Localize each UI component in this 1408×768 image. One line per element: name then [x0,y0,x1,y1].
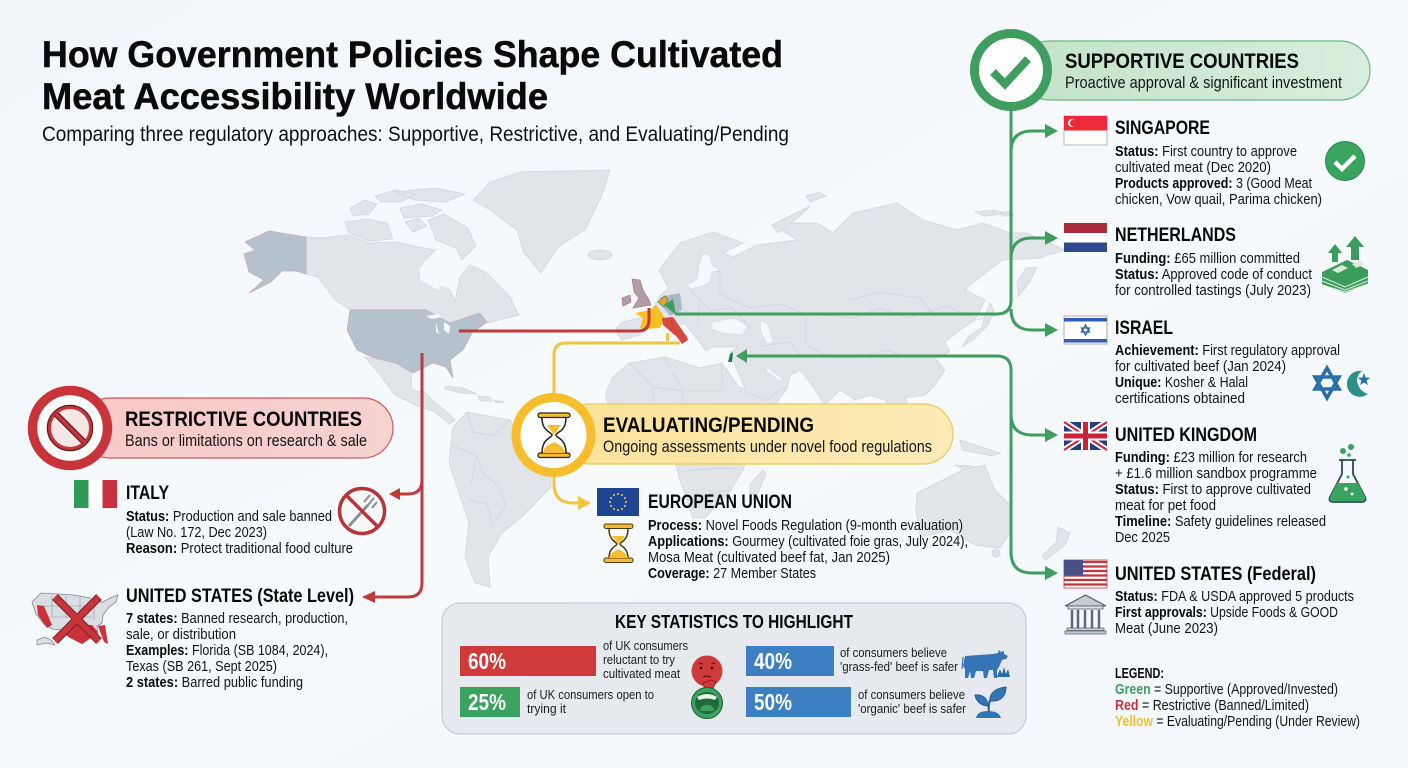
flag: Italy [74,480,117,508]
stat: 40 percent [746,645,959,676]
panel: supportive header: SUPPORTIVE COUNTRIES [1065,49,1299,73]
panel: European Union: Process: Novel Foods Regulation (9-month evaluation) [648,518,963,534]
panel: Israel: for cultivated beef (Jan 2024) [1115,359,1286,375]
panel: restrictive header: Bans or limitations on research & sale [125,432,367,450]
flag: Netherlands [1064,223,1107,252]
title [42,33,783,117]
map: New Zealand [1042,527,1070,560]
connector: restrictive arrows [362,308,649,603]
panel: Singapore [1064,116,1364,208]
stat: 25 percent: 25% [468,689,506,715]
icon: hourglass in ring [516,398,591,472]
panel: United States state level: 7 states: Banned research, production, [126,611,348,627]
title: Meat Accessibility Worldwide [42,75,548,117]
stat: 40 percent: of consumers believe [840,645,947,660]
panel: European Union: Coverage: 27 Member States [648,566,816,582]
map: Hudson Bay [420,252,458,290]
title: How Government Policies Shape Cultivated [42,33,783,75]
flag: United Kingdom [1064,422,1107,450]
panel: Italy: Status: Production and sale banned [126,509,332,525]
map: Israel highlighted [728,352,733,362]
panel: Singapore: SINGAPORE [1115,117,1210,139]
panel: United States state level: 2 states: Barred public funding [126,675,303,691]
map: Germany highlighted [660,293,682,316]
stat: 60 percent [460,638,688,681]
panel: United States state level: UNITED STATES (State Level) [126,585,354,607]
panel: United Kingdom: meat for pet food [1115,498,1216,514]
map: Canada [306,235,519,330]
panel: Israel [1064,316,1370,407]
panel: United Kingdom: Status: First to approve cultivated [1115,482,1311,498]
panel: United States state level: sale, or distribution [126,627,236,643]
icon: open mouth face [692,688,722,718]
map: Novaya Zemlya and northern islands [772,192,1014,233]
panel: Singapore: cultivated meat (Dec 2020) [1115,160,1271,176]
panel: United States state level [32,585,354,691]
stat: 25 percent: trying it [527,701,566,716]
map: Tasmania [992,549,1000,557]
panel: Israel: Achievement: First regulatory approval [1115,343,1340,359]
flag: Israel [1064,316,1107,344]
map: Kamchatka [1017,267,1037,297]
panel: Israel: Unique: Kosher & Halal [1115,375,1248,391]
icon: flask [1330,444,1366,502]
map: Eurasia [615,203,1065,420]
panel: restrictive header: RESTRICTIVE COUNTRIES [125,407,362,431]
map: Southeast Asian islands [955,440,1000,472]
map: Mexico and Central America [365,357,455,424]
panel: United States federal: Status: FDA & USDA approved 5 products [1115,589,1354,605]
panel: Netherlands: Status: Approved code of conduct [1115,267,1312,283]
panel: Netherlands [1064,223,1368,299]
heading: key statistics: KEY STATISTICS TO HIGHLIGHT [615,611,854,632]
panel: Singapore: Status: First country to approve [1115,144,1297,160]
icon: thinking face [692,656,722,689]
icon: supportive check [974,34,1048,106]
subtitle: Comparing three regulatory approaches: Supportive, Restrictive, and Evaluating/Pending [42,123,789,146]
panel: supportive header: Proactive approval & significant investment [1065,74,1342,92]
panel: Italy: ITALY [126,482,169,504]
map: Africa [606,357,788,518]
panel: supportive header [974,34,1370,106]
panel: evaluating header [516,398,953,472]
stat: 25 percent [460,687,654,717]
stat: 40 percent: 'grass-fed' beef is safer [840,659,959,674]
panel: key statistics [442,603,1026,734]
panel: United States state level: Examples: Florida (SB 1084, 2024), [126,643,328,659]
icon: star of David and crescent [1315,368,1370,398]
stat: 60 percent: 60% [468,648,506,674]
panel: United Kingdom: Dec 2025 [1115,530,1170,546]
stat: 60 percent: cultivated meat [603,666,680,681]
stat: 50 percent: of consumers believe [858,687,965,702]
panel: Netherlands: NETHERLANDS [1115,224,1236,246]
icon: government building [1065,595,1106,634]
map: France highlighted [635,305,665,329]
stat: 60 percent: of UK consumers [603,638,688,653]
map: Iceland [588,250,612,260]
panel: United States federal: First approvals: Upside Foods & GOOD [1115,605,1338,621]
panel: United States state level: Texas (SB 261, Sept 2025) [126,659,277,675]
map: Great Lakes [426,314,450,334]
panel: United States federal [1064,560,1354,637]
panel: Singapore: chicken, Vow quail, Parima chicken) [1115,192,1322,208]
map: Arctic islands [345,188,476,260]
panel: evaluating header: Ongoing assessments under novel food regulations [603,438,932,456]
panel: European Union: Applications: Gourmey (cultivated foie gras, July 2024), [648,534,968,550]
map: Baltic, Black and Caspian seas, Persian Gulf [687,253,783,381]
map: United States highlighted [244,231,487,378]
map: Madagascar [750,470,766,495]
icon: US map with red X [32,593,118,645]
panel: United Kingdom: Funding: £23 million for research [1115,450,1307,466]
map: Sardinia [666,333,669,341]
legend: LEGEND: [1115,666,1164,682]
stat: 50 percent: 'organic' beef is safer [858,701,967,716]
panel: restrictive header [32,390,393,466]
panel: European Union: Mosa Meat (cultivated beef fat, Jan 2025) [648,550,890,566]
panel: evaluating header: EVALUATING/PENDING [603,413,814,437]
stat: 60 percent: reluctant to try [603,652,675,667]
map: Greenland [473,170,610,273]
map: Netherlands highlighted [658,296,668,307]
stat: 50 percent [746,687,967,717]
flag: Singapore [1064,116,1107,145]
icon: approved check [1326,142,1364,180]
map: Australia [916,465,1012,548]
flag: European Union [597,488,639,516]
panel: Italy: Reason: Protect traditional food culture [126,541,353,557]
stat: 40 percent: 40% [754,648,792,674]
map: Caribbean [445,386,504,403]
icon: no fork [340,488,384,534]
icon: prohibition sign [32,390,108,466]
legend: Green = Supportive (Approved/Invested) [1115,682,1338,698]
legend: Red = Restrictive (Banned/Limited) [1115,698,1309,714]
panel: Singapore: Products approved: 3 (Good Meat [1115,176,1312,192]
stat: 50 percent: 50% [754,689,792,715]
panel: United Kingdom: + £1.6 million sandbox programme [1115,466,1317,482]
panel: United Kingdom: Timeline: Safety guidelines released [1115,514,1326,530]
panel: United Kingdom [1064,422,1366,546]
panel: European Union [597,488,968,582]
map: Japan [962,303,994,347]
map: United Kingdom and Ireland highlighted [622,279,651,308]
panel: United Kingdom: UNITED KINGDOM [1115,424,1257,446]
legend: Yellow = Evaluating/Pending (Under Review) [1115,714,1360,730]
legend [1115,666,1360,730]
map: Italy highlighted [662,317,688,344]
world map [244,170,1070,587]
icon: money with arrows [1322,236,1368,293]
panel: European Union: EUROPEAN UNION [648,491,792,513]
panel: Netherlands: for controlled tastings (July 2023) [1115,283,1311,299]
map: South America [449,412,551,587]
panel: Netherlands: Funding: £65 million committed [1115,251,1300,267]
panel: Italy [74,480,384,557]
icon: small hourglass [604,524,633,562]
icon: plant [975,687,1006,718]
connector: supportive arrows [664,105,1058,580]
connector: evaluating arrows [554,343,680,510]
panel: Italy: (Law No. 172, Dec 2023) [126,525,267,541]
panel: Israel: ISRAEL [1115,317,1173,339]
icon: cow [962,650,1010,678]
panel: United States federal: UNITED STATES (Federal) [1115,563,1316,585]
flag: United States [1064,560,1107,588]
stat: 25 percent: of UK consumers open to [527,687,654,702]
panel: Israel: certifications obtained [1115,391,1245,407]
panel: United States federal: Meat (June 2023) [1115,621,1218,637]
